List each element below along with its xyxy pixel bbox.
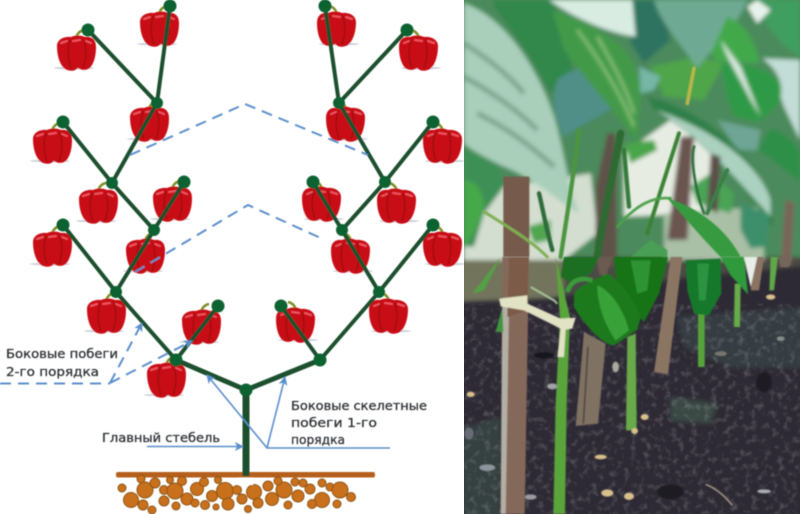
solid pointer lines: main stem and first-order shoots bbox=[147, 375, 390, 448]
label: first-order skeletal shoots: побеги 1-го bbox=[291, 416, 377, 430]
roots in soil bbox=[118, 475, 356, 514]
label: main stem: Главный стебель bbox=[102, 431, 220, 445]
photo: ground and fruits bbox=[454, 265, 800, 514]
dashed pointer lines: second-order shoots bbox=[0, 104, 368, 384]
gap under stem bbox=[238, 478, 253, 485]
stems and branches bbox=[63, 6, 433, 476]
photo: soil texture bbox=[464, 304, 800, 514]
stem nodes and tips bbox=[56, 0, 440, 396]
label: first-order skeletal shoots: Боковые скелетные bbox=[291, 399, 427, 413]
photo: pepper plants tied to stakes bbox=[454, 0, 800, 514]
soil line bbox=[116, 472, 375, 478]
photo: stems and lower leaves bbox=[484, 68, 741, 257]
diagram: pepper plant training scheme bbox=[0, 0, 465, 514]
peppers on left branches bbox=[30, 6, 221, 398]
label: second-order side shoots: Боковые побеги bbox=[6, 347, 118, 361]
photo: foliage bbox=[454, 0, 800, 323]
photo: stakes, stems and fruits at ground level bbox=[464, 257, 792, 514]
photo: soil speckles bbox=[464, 294, 785, 505]
label: first-order skeletal shoots: порядка bbox=[291, 433, 345, 447]
label: second-order side shoots: 2-го порядка bbox=[6, 365, 99, 379]
peppers on right branches bbox=[276, 6, 465, 343]
